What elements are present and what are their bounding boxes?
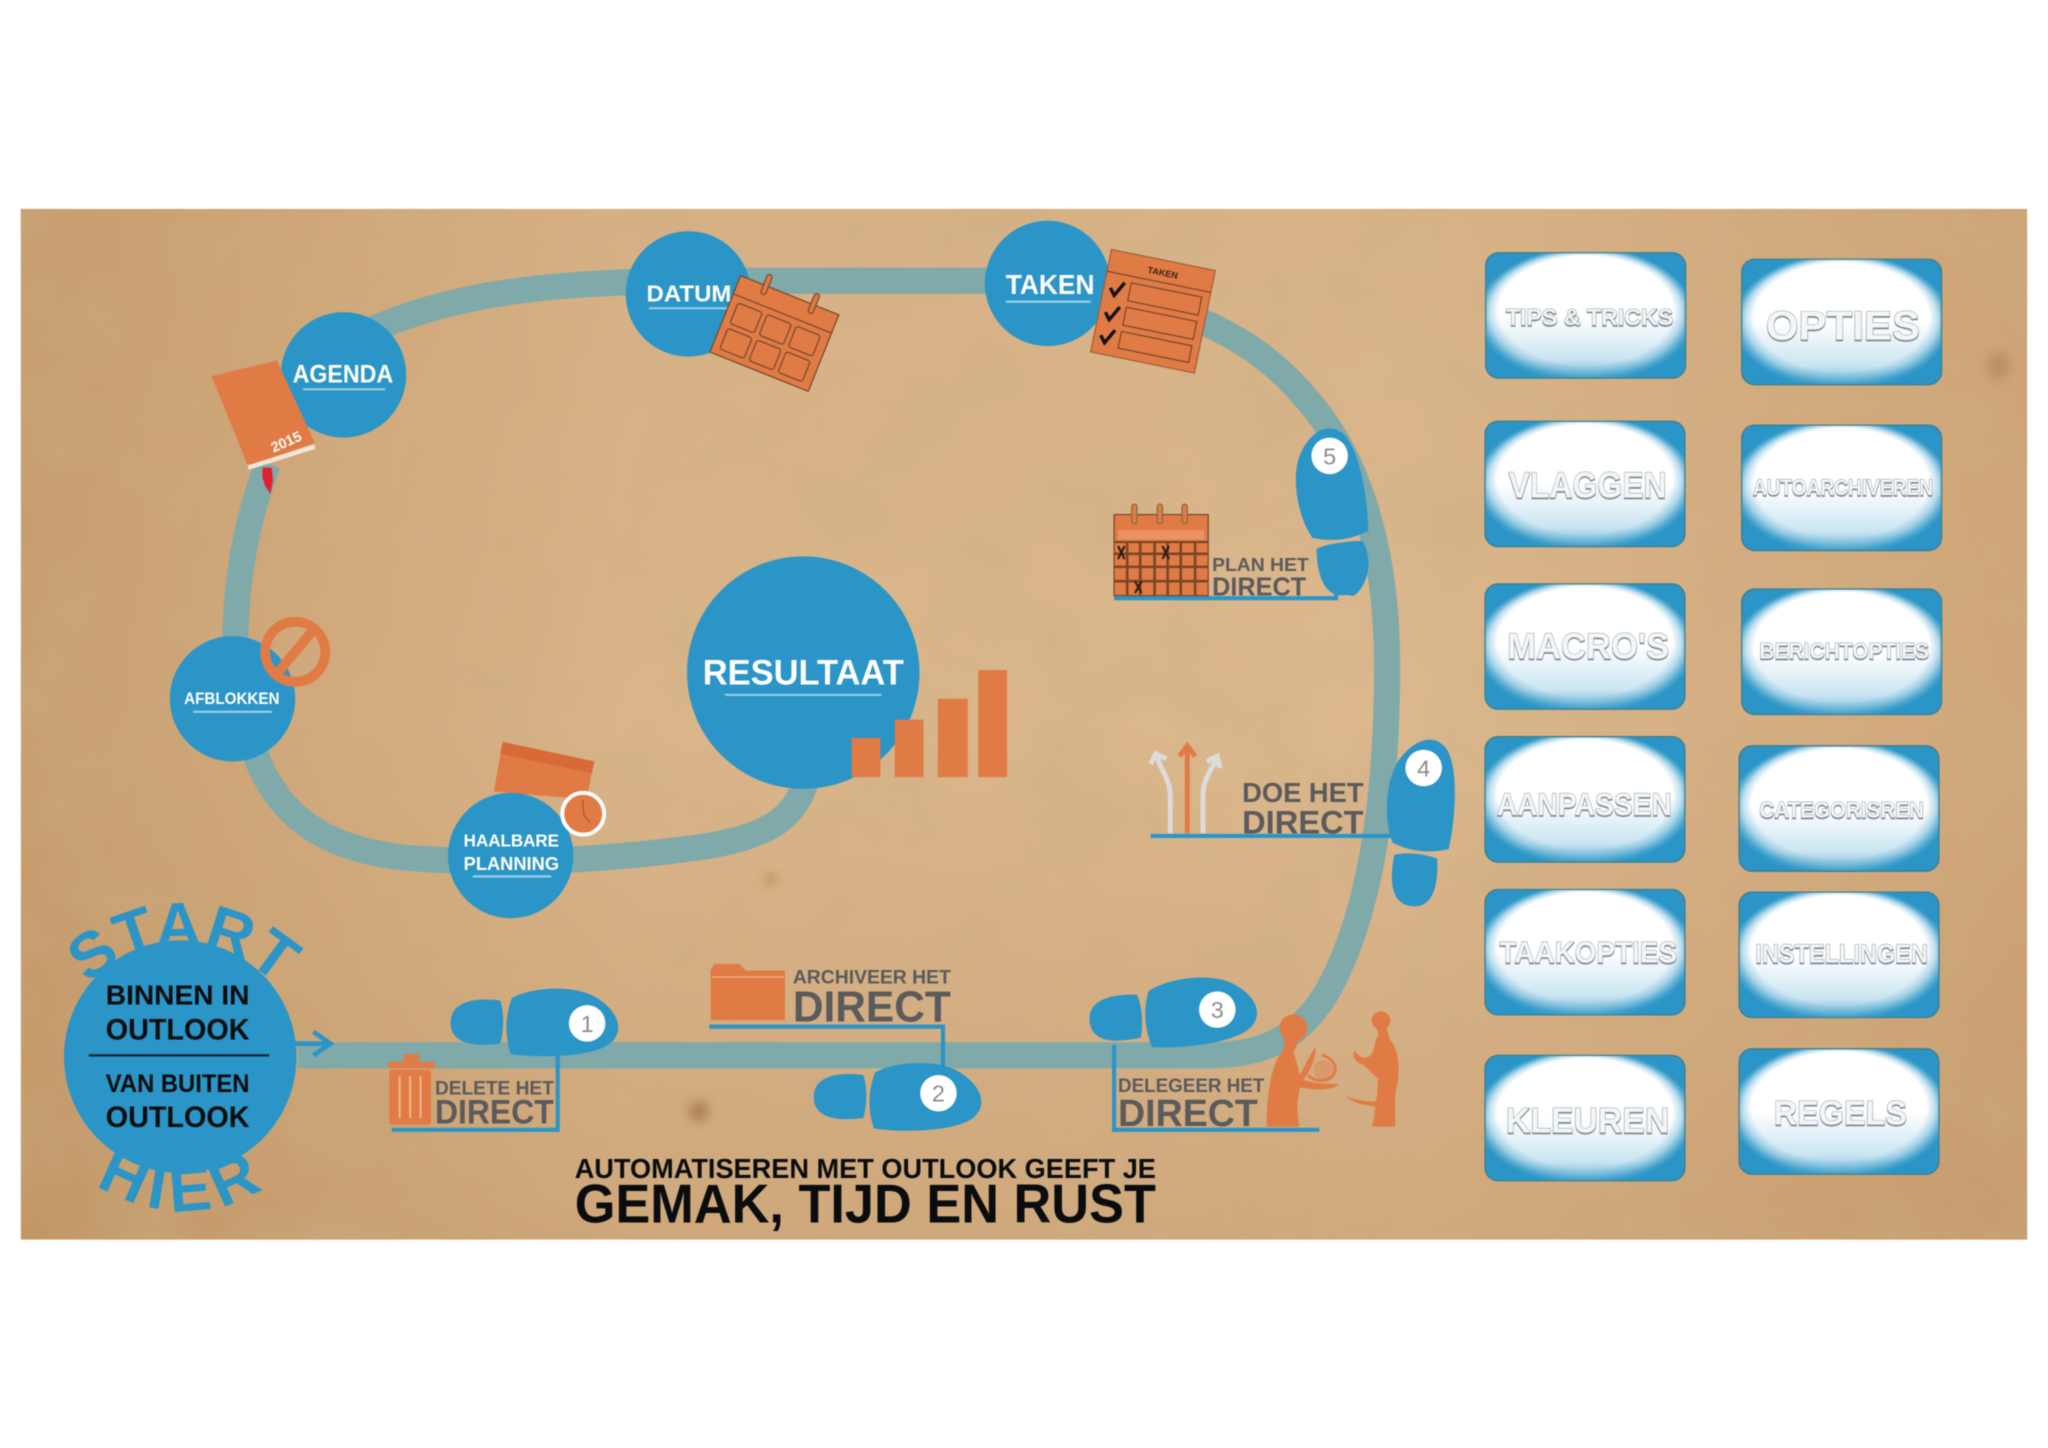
icon: planner bbox=[494, 742, 594, 799]
footprint 2: 2 bbox=[932, 1081, 945, 1107]
footprint 1: 1 bbox=[581, 1011, 594, 1037]
button: opties bbox=[1742, 259, 1942, 385]
text: START curved: START bbox=[69, 902, 304, 978]
callout: delegeer het direct: DIRECT bbox=[1118, 1093, 1258, 1135]
callout: plan het direct: DIRECT bbox=[1212, 572, 1306, 602]
step: agenda bbox=[212, 312, 406, 494]
step: afblokken: AFBLOKKEN bbox=[184, 690, 280, 708]
text: VAN BUITEN OUTLOOK: VAN BUITEN bbox=[106, 1071, 249, 1098]
circle: start disc bbox=[64, 940, 296, 1173]
button: macro's: MACRO'S bbox=[1507, 625, 1669, 666]
text: BINNEN IN OUTLOOK bbox=[106, 979, 250, 1047]
callout: plan het direct bbox=[1114, 504, 1336, 602]
route path bbox=[235, 281, 1387, 1055]
button: instellingen: INSTELLINGEN bbox=[1755, 939, 1928, 969]
button: regels: REGELS bbox=[1774, 1095, 1907, 1133]
callout: archiveer het direct: DIRECT bbox=[793, 983, 951, 1031]
step: datum: DATUM bbox=[647, 281, 731, 307]
button: categorisren: CATEGORISREN bbox=[1759, 798, 1924, 823]
button: aanpassen bbox=[1485, 737, 1685, 862]
button: opties: OPTIES bbox=[1766, 303, 1920, 349]
button: vlaggen: VLAGGEN bbox=[1509, 465, 1667, 506]
footprint 4: 4 bbox=[1417, 756, 1430, 782]
button: regels bbox=[1739, 1049, 1939, 1174]
step: agenda: AGENDA bbox=[293, 362, 393, 389]
callout: doe het direct: DIRECT bbox=[1242, 803, 1364, 840]
button: taakopties bbox=[1485, 889, 1685, 1015]
icon: calendar bbox=[710, 265, 843, 391]
icon: clock bbox=[562, 793, 604, 835]
button: kleuren: KLEUREN bbox=[1506, 1101, 1669, 1140]
callout: delete het direct: DELETE HET bbox=[435, 1079, 554, 1100]
icon: trash can bbox=[388, 1054, 435, 1125]
button: autoarchiveren: AUTOARCHIVEREN bbox=[1753, 475, 1933, 500]
callout: delegeer het direct: DELEGEER HET bbox=[1118, 1076, 1265, 1097]
text: HIER curved: HIER bbox=[98, 1152, 262, 1213]
bar chart bbox=[852, 670, 1007, 777]
icon: agenda book: 2015 bbox=[269, 429, 304, 456]
callout: doe het direct: DOE HET bbox=[1242, 777, 1364, 808]
step: haalbare planning: HAALBARE bbox=[464, 830, 559, 850]
arrow from start bbox=[295, 1032, 330, 1055]
button: tips & tricks bbox=[1486, 253, 1686, 378]
footprint 4 bbox=[1378, 736, 1460, 909]
button: tips & tricks: TIPS & TRICKS bbox=[1506, 304, 1673, 330]
callout: plan het direct: PLAN HET bbox=[1212, 554, 1309, 575]
paper panel background bbox=[21, 209, 2027, 1240]
icon: month calendar bbox=[1114, 504, 1208, 596]
footprint 3 bbox=[1087, 973, 1259, 1055]
text: BINNEN IN OUTLOOK: BINNEN IN bbox=[106, 979, 249, 1010]
footprint 1 bbox=[451, 989, 618, 1056]
button: berichtopties bbox=[1742, 589, 1942, 714]
text: BINNEN IN OUTLOOK: OUTLOOK bbox=[106, 1014, 250, 1047]
footprint 3: 3 bbox=[1211, 997, 1224, 1023]
button: autoarchiveren bbox=[1742, 425, 1942, 551]
button: instellingen bbox=[1739, 892, 1939, 1017]
icon: folder bbox=[711, 964, 785, 1020]
button: berichtopties: BERICHTOPTIES bbox=[1759, 638, 1929, 663]
button grid bbox=[1485, 253, 1942, 1181]
start circle bbox=[63, 902, 304, 1213]
step: taken bbox=[985, 221, 1215, 373]
bottom headline: AUTOMATISEREN MET OUTLOOK GEEFT JE bbox=[575, 1153, 1156, 1184]
footprint 5 bbox=[1288, 424, 1379, 600]
bottom headline: GEMAK, TIJD EN RUST bbox=[575, 1173, 1156, 1235]
button: macro's bbox=[1485, 584, 1685, 709]
callout: doe het direct bbox=[1151, 746, 1391, 840]
icon: task list bbox=[1091, 249, 1215, 373]
text: VAN BUITEN OUTLOOK bbox=[106, 1071, 250, 1134]
text: VAN BUITEN OUTLOOK: OUTLOOK bbox=[106, 1101, 250, 1134]
button: categorisren bbox=[1739, 746, 1939, 871]
icon: task list: TAKEN bbox=[1147, 265, 1179, 281]
icon: two people with globe bbox=[1267, 1011, 1399, 1127]
footprint 5: 5 bbox=[1323, 443, 1336, 469]
icon: agenda book bbox=[212, 361, 315, 494]
callout: delete het direct bbox=[388, 1051, 558, 1131]
step: datum bbox=[626, 231, 843, 391]
step: afblokken bbox=[170, 622, 325, 761]
callout: delegeer het direct bbox=[1114, 1011, 1399, 1135]
step: haalbare planning bbox=[448, 742, 604, 918]
callout: delete het direct: DIRECT bbox=[435, 1093, 554, 1131]
footprint 2 bbox=[814, 1063, 981, 1131]
step: haalbare planning: PLANNING bbox=[464, 853, 559, 874]
icon: prohibited sign bbox=[265, 622, 325, 682]
button: aanpassen: AANPASSEN bbox=[1497, 787, 1672, 822]
icon: branching arrows bbox=[1151, 746, 1220, 833]
button: vlaggen bbox=[1485, 421, 1685, 547]
callout: archiveer het direct bbox=[709, 964, 951, 1066]
callout: archiveer het direct: ARCHIVEER HET bbox=[793, 967, 951, 989]
button: taakopties: TAAKOPTIES bbox=[1499, 937, 1677, 970]
resultaat bbox=[687, 556, 1007, 789]
button: kleuren bbox=[1485, 1055, 1685, 1181]
resultaat: RESULTAAT bbox=[703, 653, 904, 692]
step: taken: TAKEN bbox=[1006, 269, 1095, 300]
